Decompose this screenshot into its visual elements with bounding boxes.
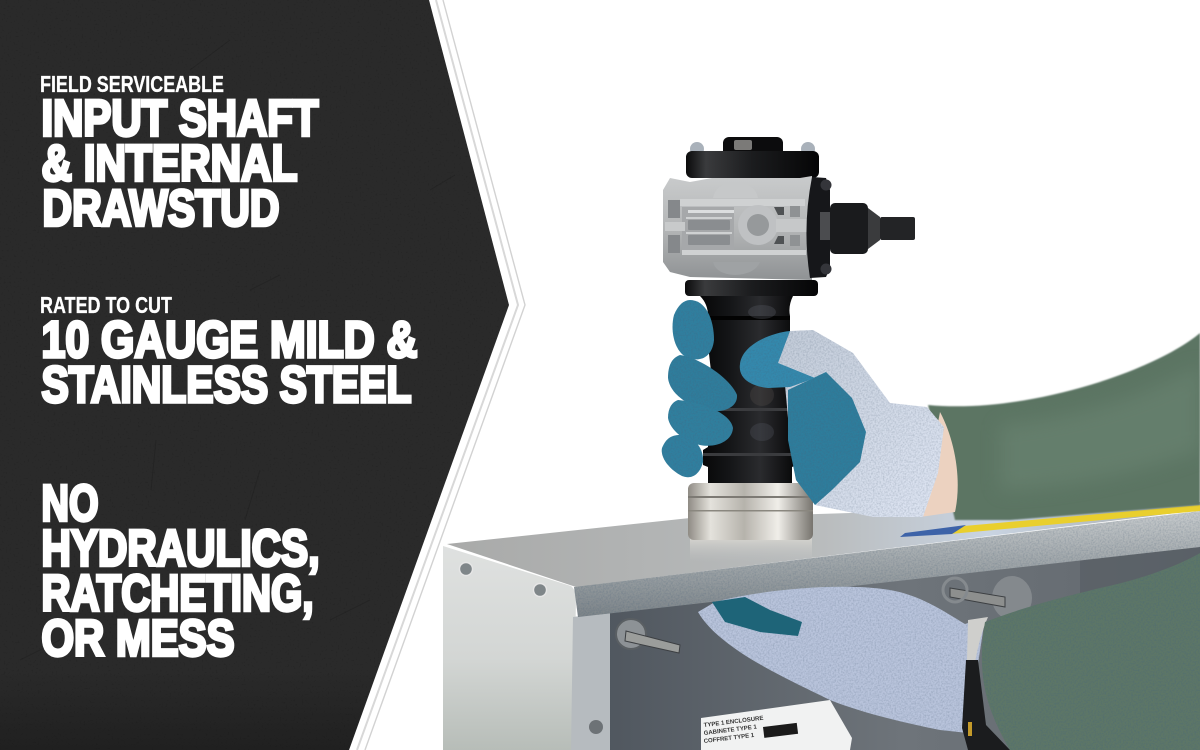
top bump xyxy=(713,182,758,198)
blue glove patch xyxy=(712,597,802,636)
finger 3 xyxy=(668,400,733,446)
stud right xyxy=(950,588,1005,607)
lower glove knit xyxy=(698,587,985,733)
heading: 10 gauge mild and stainless steel xyxy=(42,311,418,413)
top screws xyxy=(690,142,815,156)
finger 1 xyxy=(673,300,714,359)
sleeve highlight xyxy=(1000,365,1200,490)
stud washer right xyxy=(992,576,1032,620)
photo: lower arm and gloved hand xyxy=(698,553,1200,750)
interior right panel shade xyxy=(1080,545,1200,750)
text block: rated to cut xyxy=(40,292,418,413)
panel wear at bottom xyxy=(0,670,378,750)
green sleeve lower xyxy=(982,553,1200,750)
screw left 1 xyxy=(460,562,472,576)
eyebrow: field serviceable: FIELD SERVICEABLE xyxy=(40,71,224,97)
blue palm xyxy=(788,372,866,505)
finger 4 xyxy=(662,435,703,477)
heading: 10 gauge mild and stainless steel: STAINLESS STEEL xyxy=(42,356,412,413)
heading: 10 gauge mild and stainless steel: 10 GAUGE MILD & xyxy=(42,311,418,368)
text block: field serviceable input shaft xyxy=(40,71,318,236)
certification label xyxy=(701,700,852,750)
stud left xyxy=(625,631,680,653)
screw left 2 xyxy=(534,584,546,596)
thumb xyxy=(740,331,815,388)
strip rivet xyxy=(589,720,603,734)
lower flange xyxy=(685,280,818,296)
text block: no hydraulics, ratcheting, or mess: NO xyxy=(42,474,98,532)
photo: upper arm and gloved hand xyxy=(662,300,1200,520)
heading: input shaft and internal drawstud: DRAWSTUD xyxy=(42,180,280,236)
aluminium housing xyxy=(663,176,812,280)
heading: input shaft and internal drawstud xyxy=(42,90,318,236)
yellow label strip xyxy=(950,505,1200,534)
heading: input shaft and internal drawstud: & INTERNAL xyxy=(42,134,298,192)
certification label: COFFRET TYPE 1 xyxy=(704,733,755,745)
cuff xyxy=(966,617,988,700)
stud washer left xyxy=(616,619,646,649)
text block: no hydraulics, ratcheting, or mess: HYDRAULICS, xyxy=(42,520,320,576)
certification label: GABINETE TYPE 1 xyxy=(704,724,758,737)
upper flange xyxy=(686,137,819,178)
green sleeve upper xyxy=(928,333,1200,520)
glove back knit xyxy=(770,330,944,517)
heading: input shaft and internal drawstud: INPUT SHAFT xyxy=(42,90,318,146)
text block: no hydraulics, ratcheting, or mess: OR MESS xyxy=(42,610,234,666)
panel: dark chevron background xyxy=(0,0,509,750)
panel scratches xyxy=(20,40,455,660)
front frame strip xyxy=(571,612,610,750)
top surface xyxy=(447,502,1200,587)
side face xyxy=(443,546,576,750)
photo: enclosure box xyxy=(443,502,1200,750)
text block: no hydraulics, ratcheting, or mess xyxy=(42,474,320,666)
black body xyxy=(700,296,797,483)
top reflection of collar xyxy=(690,538,812,562)
side plate and hex drive xyxy=(806,177,915,278)
eyebrow: rated to cut: RATED TO CUT xyxy=(40,292,172,318)
watch xyxy=(962,660,1010,750)
certification label: TYPE 1 ENCLOSURE xyxy=(704,716,764,729)
text block: no hydraulics, ratcheting, or mess: RATCHETING, xyxy=(42,564,314,622)
finger 2 xyxy=(668,355,737,411)
base collar xyxy=(688,483,813,540)
front lip xyxy=(574,511,1200,617)
photo: tool xyxy=(663,137,915,540)
blue label strip xyxy=(900,525,966,537)
chevron outline strokes xyxy=(357,0,525,750)
box interior xyxy=(606,545,1200,750)
wrist skin xyxy=(920,412,958,517)
stud base right xyxy=(943,578,967,602)
